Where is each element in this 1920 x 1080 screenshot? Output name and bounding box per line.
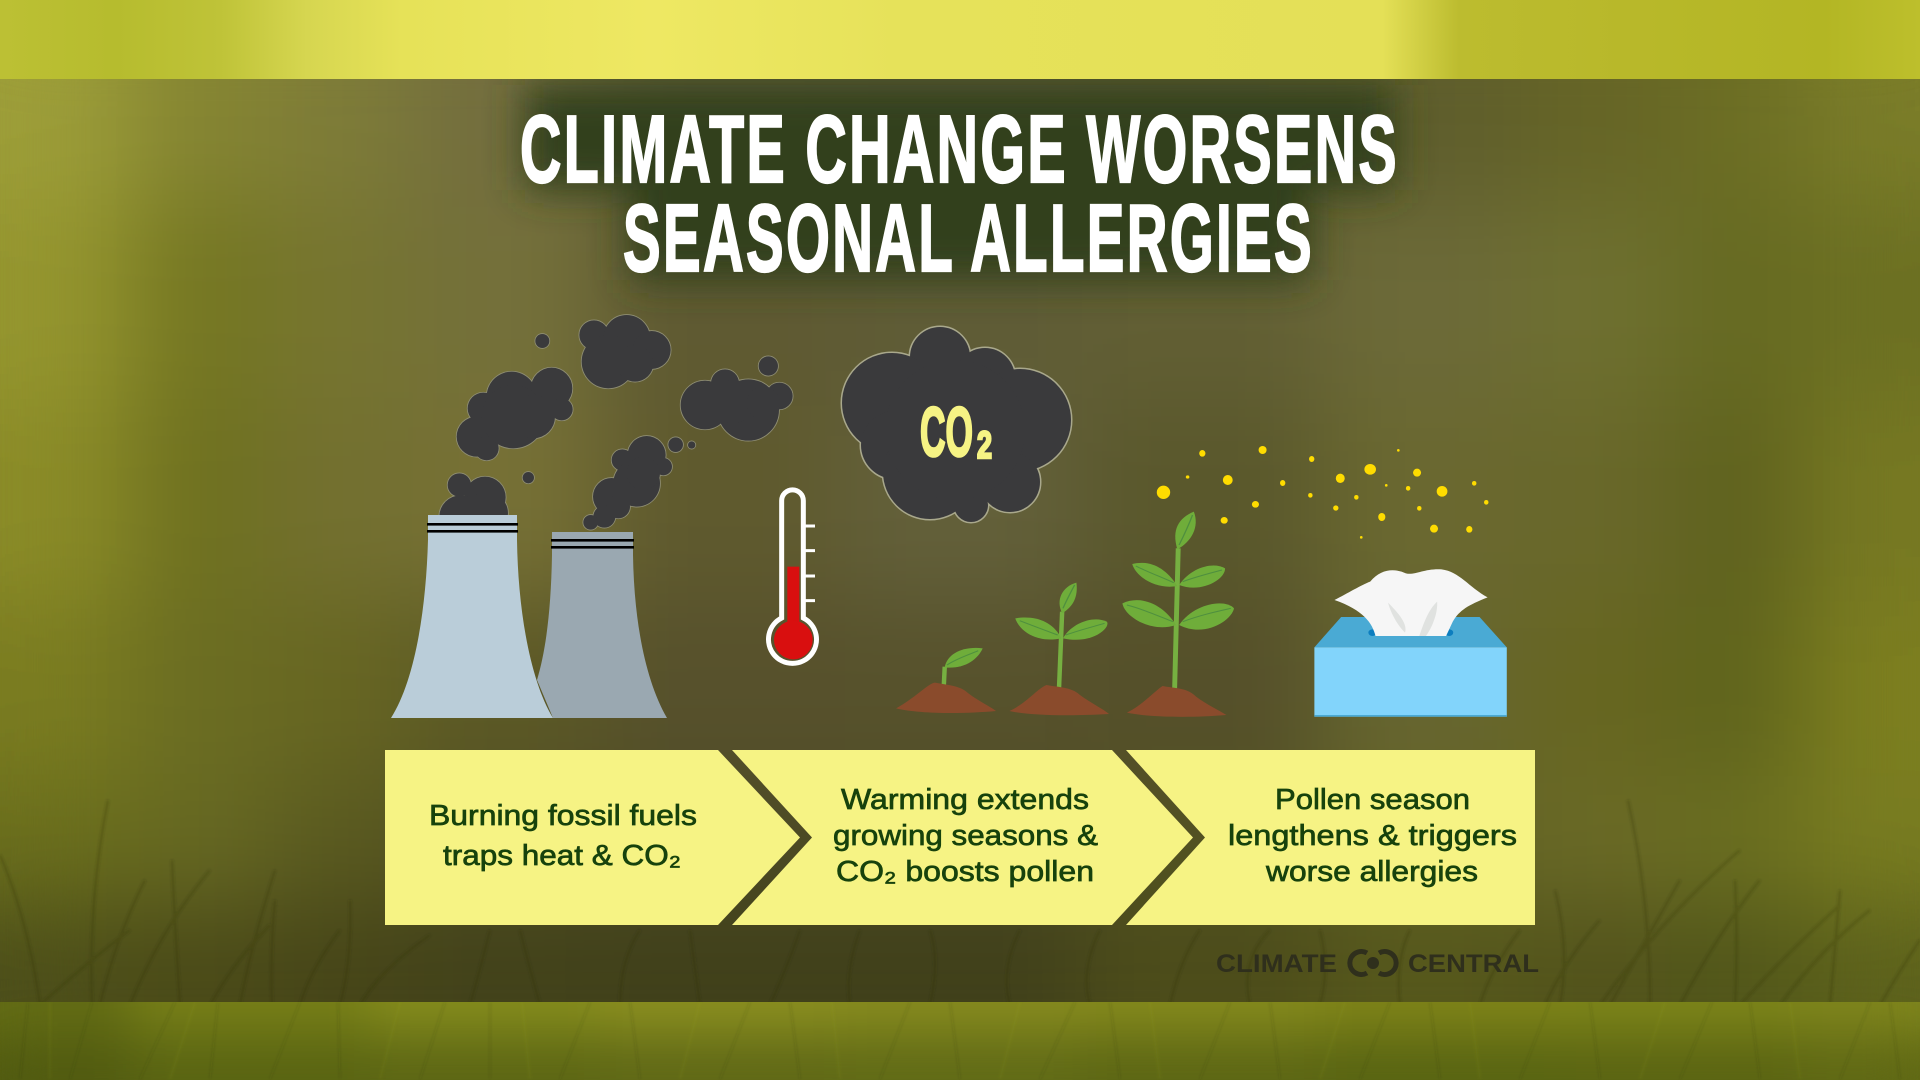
logo: Climate Central	[1216, 950, 1539, 978]
step 2: CO₂ boosts pollen	[836, 856, 1094, 888]
step 1: Burning fossil fuels	[429, 800, 697, 832]
icon: pollen dots	[1157, 446, 1488, 539]
background: top yellow strip	[0, 0, 1920, 79]
step 1: traps heat & CO₂	[443, 840, 681, 872]
rear cooling tower	[537, 532, 667, 718]
icon: growing seedlings	[896, 512, 1234, 717]
step 2: Warming extends	[841, 784, 1089, 816]
seedling 1	[896, 648, 996, 713]
seedling 2	[1009, 583, 1109, 715]
CO2 label: CO	[920, 393, 973, 471]
panel: three-step chevron flow	[385, 750, 1535, 925]
icon: thermometer	[768, 490, 816, 663]
step 3: worse allergies	[1265, 856, 1478, 888]
CO2 label: 2	[977, 425, 992, 467]
step 2	[732, 750, 1193, 925]
title	[520, 96, 1399, 292]
icon: smoke clouds	[439, 315, 793, 538]
logo: Climate Central: CLIMATE	[1216, 950, 1337, 978]
title: SEASONAL ALLERGIES	[623, 185, 1314, 292]
icon: cooling towers	[391, 515, 667, 718]
background: grass tufts in band	[0, 800, 1920, 1005]
logo: Climate Central: CENTRAL	[1408, 950, 1539, 978]
step 3: Pollen season	[1275, 784, 1470, 816]
step 1	[385, 750, 800, 925]
background: fine grass in strip	[20, 1002, 1900, 1079]
step 2: growing seasons &	[833, 820, 1098, 852]
step 3: lengthens & triggers	[1228, 820, 1517, 852]
step 3	[1126, 750, 1535, 925]
seedling 3	[1122, 512, 1234, 717]
front cooling tower	[391, 515, 553, 718]
background: bottom grass strip	[0, 1002, 1920, 1080]
icon: tissue box	[1314, 569, 1507, 717]
icon: CO2 cloud	[842, 327, 1071, 522]
